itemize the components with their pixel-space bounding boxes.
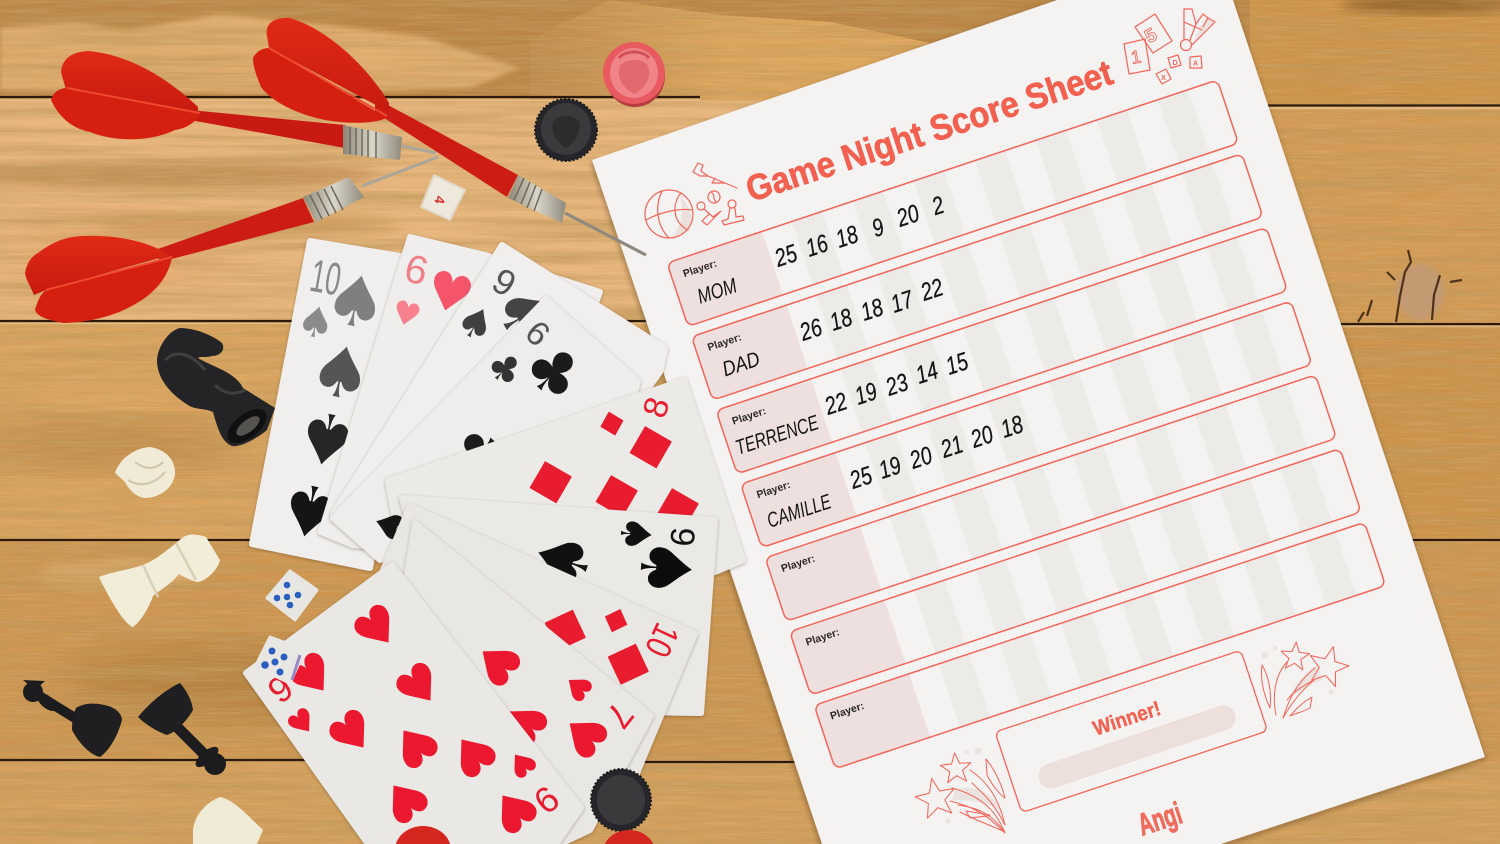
- card: nine of hearts: ♥: [316, 696, 390, 772]
- row 6: blank: [790, 449, 1361, 695]
- icon: left shooting stars: [912, 748, 1005, 833]
- handwritten names and scores: 19: [851, 377, 881, 410]
- darts group: [25, 18, 646, 323]
- icon: tile A: A: [1193, 60, 1198, 68]
- card: nine of spades, inverted: ♠: [515, 518, 613, 604]
- card: ten of spades: ♠: [288, 391, 366, 485]
- handwritten names and scores: 16: [802, 229, 832, 262]
- card: six of hearts: 6: [400, 246, 432, 294]
- card: six of clubs: ♣: [509, 327, 599, 418]
- handwritten names and scores: 25: [770, 239, 801, 273]
- row 3: Terrence: Player:: [731, 405, 768, 428]
- handwritten names and scores: 22: [916, 273, 947, 307]
- card: nine of hearts: ♥: [377, 706, 451, 782]
- icon: right shooting stars: [1261, 641, 1353, 718]
- card: nine of spades, inverted: [402, 498, 715, 713]
- handwritten names and scores: 20: [905, 441, 936, 475]
- handwritten names and scores: 18: [826, 303, 856, 336]
- card: ten of diamonds: ♦: [591, 597, 640, 647]
- wood knot: [1358, 250, 1462, 322]
- card: seven of hearts: ♥: [485, 685, 561, 759]
- handwritten names and scores: 15: [942, 347, 972, 380]
- black knight chess piece: [157, 328, 275, 450]
- die showing 4: 4: [431, 195, 449, 205]
- handwritten names and scores: TERRENCE: [733, 411, 822, 460]
- card: ten of diamonds: ♦: [520, 587, 610, 676]
- handwritten names and scores: 2: [928, 191, 948, 221]
- row 2: Dad: [692, 154, 1263, 400]
- card: six of clubs: [333, 299, 638, 560]
- card: nine of hearts: ♥: [383, 649, 457, 725]
- icon: tile X: [1156, 69, 1171, 84]
- card: eight of diamonds: ♦: [635, 468, 721, 553]
- score sheet paper shadow: [590, 0, 1487, 844]
- handwritten names and scores: 9: [868, 213, 887, 243]
- handwritten names and scores: 26: [795, 313, 826, 347]
- card: seven of hearts: [400, 523, 651, 844]
- handwritten names and scores: 20: [966, 420, 997, 454]
- card: nine of hearts: ♥: [276, 639, 350, 715]
- score rows: [667, 80, 1386, 769]
- card: nine of spades: 9: [485, 259, 523, 305]
- winner name field: [1051, 718, 1223, 776]
- title: Game Night Score Sheet: [741, 52, 1118, 210]
- card: nine of hearts: ♥: [279, 699, 325, 746]
- icon: basketball: [645, 190, 693, 238]
- handwritten names and scores: 18: [832, 220, 862, 253]
- handwritten names and scores: 21: [936, 430, 967, 464]
- black checker bottom: [591, 769, 651, 831]
- card: eight of diamonds: [362, 380, 743, 680]
- icon: game piece right: [722, 200, 744, 225]
- white knight bottom: [193, 797, 263, 844]
- row 5: blank: [765, 375, 1337, 621]
- icon: card showing 5: [1135, 14, 1172, 53]
- handwritten names and scores: 25: [845, 461, 876, 495]
- winner box: [995, 650, 1268, 813]
- icon: card showing 5: 5: [1141, 24, 1161, 48]
- icon: tile D: [1168, 55, 1181, 68]
- row 7: blank: Player:: [829, 700, 866, 722]
- white bishop chess piece: [115, 447, 175, 498]
- icon: game piece left: [697, 202, 721, 225]
- row 5: blank: Player:: [780, 553, 817, 575]
- card: ten of spades: ♠: [292, 295, 339, 350]
- row 4: Camille: Player:: [755, 479, 792, 501]
- card: six of hearts: [321, 237, 600, 555]
- card: eight of diamonds: ♦: [608, 406, 694, 491]
- card: eight of diamonds: ♦: [589, 401, 636, 449]
- card: eight of diamonds: ♦: [574, 455, 660, 540]
- die showing 4: [421, 175, 465, 220]
- handwritten names and scores: 22: [820, 387, 851, 421]
- card: nine of spades, inverted: ♠: [610, 513, 661, 554]
- icon: dart: [693, 163, 737, 188]
- handwritten names and scores: 14: [912, 356, 942, 389]
- row 2: Dad: Player:: [706, 331, 743, 354]
- playing cards fan: [246, 237, 743, 844]
- card: nine of hearts: ♥: [435, 715, 509, 791]
- card: eight of diamonds: 8: [636, 393, 678, 422]
- black checker: [535, 99, 597, 161]
- card: eight of diamonds: ♠: [362, 501, 421, 552]
- icon: card showing 1: [1124, 39, 1150, 74]
- red checkers bottom: [395, 826, 655, 844]
- card: seven of hearts: ♥: [545, 697, 621, 771]
- red checker: [603, 42, 665, 107]
- dart 1: [51, 51, 436, 160]
- dart 2: [253, 18, 646, 255]
- black pawn left: [23, 680, 122, 757]
- white die on card: [255, 637, 305, 683]
- card: ten of spades: ♠: [302, 326, 380, 420]
- handwritten names and scores: 20: [892, 199, 923, 233]
- card: nine of hearts: ♥: [499, 740, 545, 787]
- row 1: Mom: Player:: [682, 258, 719, 280]
- handwritten names and scores: [695, 191, 1027, 533]
- card: nine of hearts: ♥: [341, 591, 415, 667]
- card: nine of spades, inverted: ♠: [622, 534, 708, 602]
- card: seven of hearts: ♥: [458, 625, 534, 699]
- score sheet paper: [592, 0, 1485, 844]
- card: ten of spades: 10: [306, 249, 345, 305]
- handwritten names and scores: DAD: [720, 348, 763, 381]
- handwritten names and scores: 23: [881, 368, 912, 402]
- black pawn right: [138, 683, 226, 775]
- handwritten names and scores: 18: [997, 410, 1027, 443]
- card: six of hearts: ♥: [388, 292, 425, 336]
- card: ten of spades: ♠: [317, 255, 395, 349]
- handwritten names and scores: MOM: [695, 274, 740, 309]
- card: nine of spades: [333, 245, 665, 560]
- white rook chess piece: [99, 534, 220, 627]
- card: six of clubs: 6: [518, 313, 557, 354]
- row 7: blank: [814, 522, 1386, 769]
- handwritten names and scores: CAMILLE: [764, 490, 835, 533]
- card: ten of diamonds: 10: [637, 617, 688, 663]
- card: nine of hearts: ♥: [367, 761, 441, 837]
- card: seven of hearts: ♥: [554, 664, 601, 710]
- card: ten of spades: [252, 241, 400, 568]
- icon: tile X: X: [1161, 75, 1166, 82]
- card: ten of spades: ♠: [271, 463, 349, 557]
- handwritten names and scores: 19: [875, 451, 905, 484]
- white die with five pips: [267, 571, 317, 620]
- icon: tile D: D: [1172, 60, 1178, 67]
- card: eight of diamonds: ♦: [508, 441, 594, 526]
- card: six of hearts: ♥: [419, 259, 480, 329]
- card: ten of diamonds: ♦: [583, 621, 673, 710]
- icon: card showing 1: 1: [1129, 46, 1143, 68]
- card: seven of hearts: 7: [598, 695, 642, 736]
- icon: tile A: [1190, 56, 1202, 68]
- icon: shuttlecock: [1180, 9, 1215, 50]
- winner heading: Winner!: [1090, 697, 1164, 741]
- card: nine of spades: ♠: [475, 267, 577, 363]
- card: nine of hearts: 9: [526, 778, 567, 822]
- card: nine of hearts: 9: [260, 667, 301, 711]
- card: nine of hearts: [246, 565, 581, 844]
- card: six of clubs: ♣: [433, 410, 523, 501]
- Angi logo: Angi: [1133, 796, 1186, 842]
- card: ten of diamonds: [383, 506, 695, 790]
- card: nine of spades: ♠: [448, 293, 504, 354]
- handwritten names and scores: 17: [887, 285, 918, 318]
- handwritten names and scores: 18: [857, 293, 887, 326]
- row 4: Camille: [741, 301, 1312, 548]
- card: nine of spades, inverted: 9: [662, 526, 702, 548]
- dart 3: [25, 157, 438, 323]
- row 6: blank: Player:: [804, 626, 841, 649]
- row 3: Terrence: [716, 227, 1287, 474]
- row 1: Mom: [667, 80, 1238, 326]
- icon: small ball: [708, 191, 720, 203]
- card: six of clubs: ♣: [478, 341, 532, 397]
